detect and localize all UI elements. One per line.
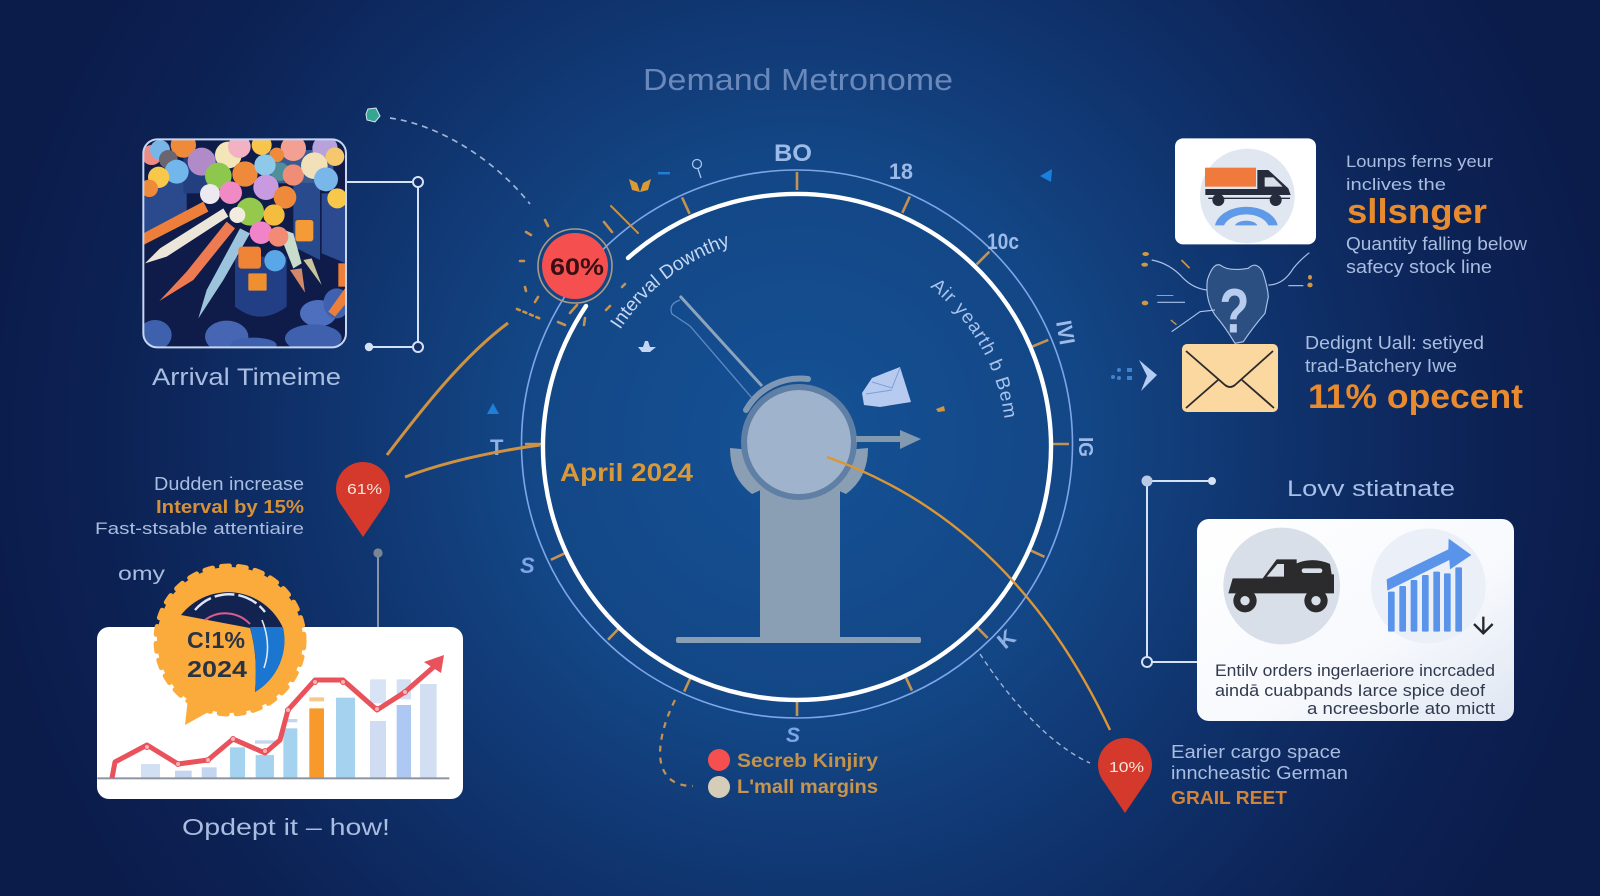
60 percent marker bbox=[517, 206, 638, 325]
dial labels: 10c bbox=[987, 229, 1019, 254]
icon: teal gem bbox=[366, 108, 380, 122]
metronome body bbox=[671, 296, 921, 643]
icon: truck bbox=[1205, 168, 1291, 225]
badge text bbox=[187, 627, 247, 682]
title: Demand Metronome bbox=[643, 62, 953, 97]
orange connector lines bbox=[387, 323, 1110, 730]
dial labels: T bbox=[490, 435, 504, 460]
dial labels: 18 bbox=[889, 159, 913, 184]
text block: cargo space: Earier cargo space bbox=[1171, 742, 1341, 762]
dial ticks bbox=[525, 172, 1069, 716]
pin: 61 percent: 61% bbox=[347, 481, 382, 498]
dial labels: IG bbox=[1074, 437, 1096, 457]
panel: truck card bbox=[1175, 138, 1316, 244]
text block: slinger: Quantity falling below bbox=[1346, 234, 1528, 254]
text block: opecent bbox=[1305, 333, 1523, 416]
decorative markers bbox=[487, 160, 1052, 414]
bracket right bbox=[1142, 476, 1215, 667]
card text: a ncreesborle ato mictt bbox=[1307, 699, 1495, 718]
panel: demand chart bbox=[97, 627, 463, 799]
panel: arrival timeline image bbox=[138, 132, 350, 353]
panel: low stiatnate card bbox=[1197, 519, 1514, 721]
lower blobs bbox=[144, 320, 172, 346]
metronome dial bbox=[490, 140, 1096, 747]
text block: slinger: sllsnger bbox=[1347, 193, 1487, 231]
legend: L'mall margins bbox=[737, 777, 878, 798]
text block: opecent: trad-Batchery Iwe bbox=[1305, 356, 1457, 376]
heading: low stiatnate: Lovv stiatnate bbox=[1287, 476, 1455, 501]
label: small tag: omy bbox=[118, 564, 166, 585]
cubes bbox=[144, 145, 160, 165]
bar chart bbox=[97, 679, 449, 779]
pens bbox=[143, 202, 208, 245]
icon: question shield bbox=[1141, 252, 1313, 346]
curved label right: Air yearth b Bem bbox=[930, 280, 1014, 418]
pin stem bbox=[373, 548, 383, 628]
burst rays bbox=[517, 206, 638, 325]
dial labels: IVI bbox=[1051, 319, 1080, 347]
line chart bbox=[112, 655, 444, 778]
pin: 61 percent bbox=[336, 462, 390, 537]
april label: April 2024 bbox=[560, 459, 693, 487]
dashed connector lower right bbox=[980, 654, 1090, 763]
outer ring bbox=[522, 170, 1072, 718]
dial labels: BO bbox=[774, 140, 812, 167]
text block: opecent: Dedignt Uall: setiyed bbox=[1305, 333, 1484, 353]
text block: opecent: 11% opecent bbox=[1308, 378, 1523, 416]
badge text: C!1% bbox=[187, 627, 245, 653]
icon: rising bars bbox=[1371, 529, 1493, 643]
dial labels: S bbox=[786, 724, 800, 747]
dial labels bbox=[490, 140, 1096, 747]
text block: cargo space: inncheastic German bbox=[1171, 763, 1348, 783]
callout badge bbox=[156, 566, 304, 725]
icon: question shield: ? bbox=[1219, 276, 1249, 346]
60 percent marker: 60% bbox=[550, 254, 604, 281]
text block: slinger: Lounps ferns yeur bbox=[1346, 152, 1493, 171]
text block: sudden increase: Dudden increase bbox=[154, 474, 304, 494]
icon: envelope bbox=[1182, 344, 1278, 412]
dashed connector top left bbox=[366, 108, 530, 204]
legend bbox=[708, 749, 878, 798]
text block: cargo space bbox=[1171, 742, 1348, 808]
text block: sudden increase: Fast-stsable attentiaire bbox=[95, 519, 304, 538]
curved label left: Interval Downthy bbox=[610, 236, 727, 328]
text block: slinger: inclives the bbox=[1346, 175, 1446, 194]
text block: slinger: safecy stock line bbox=[1346, 257, 1492, 277]
legend: Secreb Kinjiry bbox=[737, 751, 878, 772]
text block: sudden increase: Interval by 15% bbox=[156, 497, 304, 517]
pin: 10 percent bbox=[1098, 738, 1152, 813]
card text: Entilv orders ingerlaeriore incrcaded bbox=[1215, 661, 1495, 680]
card text bbox=[1215, 661, 1495, 718]
dial labels: K bbox=[992, 624, 1020, 654]
dial labels: S bbox=[520, 553, 535, 578]
text block: sudden increase bbox=[95, 474, 304, 538]
text block: cargo space: GRAIL REET bbox=[1171, 788, 1287, 808]
icon: paper weight bbox=[862, 367, 911, 407]
icon: pickup truck bbox=[1223, 528, 1340, 644]
inner white ring bbox=[543, 194, 1051, 700]
cylinders bbox=[143, 180, 187, 233]
small boat icon bbox=[638, 341, 656, 352]
icon: arrow with dots bbox=[1111, 360, 1157, 391]
dashed orange connector to legend bbox=[660, 700, 693, 786]
card text: aindā cuabpands Iarce spice deof bbox=[1215, 681, 1485, 700]
text block: slinger bbox=[1346, 152, 1528, 277]
bracket left bbox=[347, 177, 423, 352]
badge text: 2024 bbox=[187, 656, 247, 682]
heading: arrival timeline: Arrival Timeime bbox=[152, 364, 341, 391]
pin: 10 percent: 10% bbox=[1109, 759, 1144, 776]
caption: chart: Opdept it – how! bbox=[182, 814, 390, 840]
